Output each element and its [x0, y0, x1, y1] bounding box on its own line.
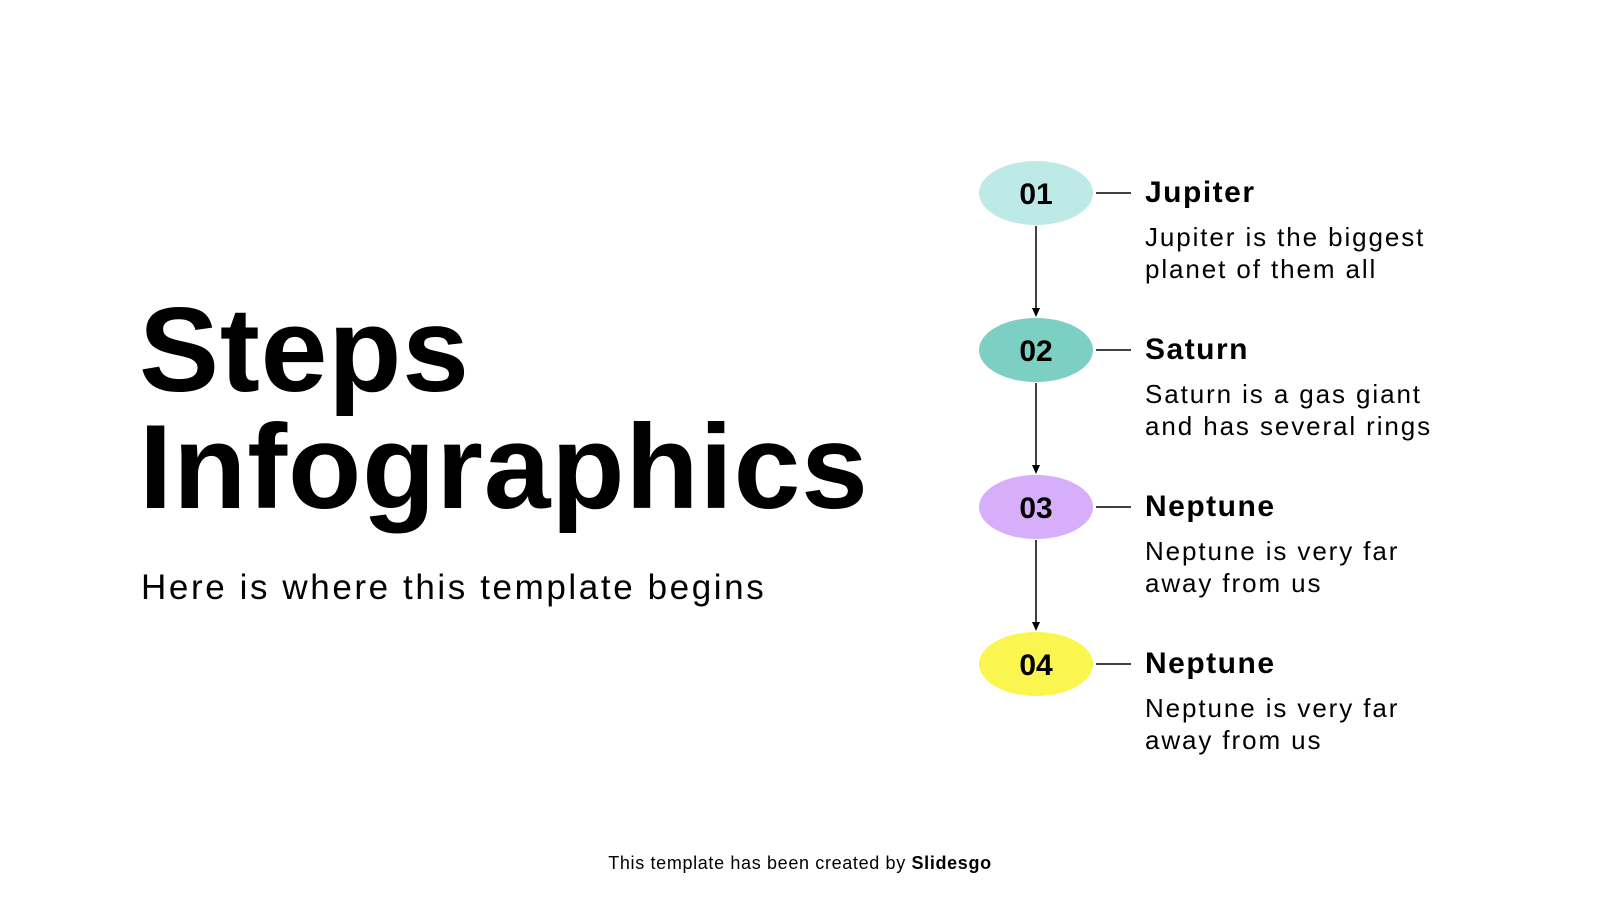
arrows: [1032, 226, 1040, 631]
text: away from us: [1145, 568, 1322, 598]
step 01: 01: [1019, 178, 1053, 211]
step 04: 04: [1019, 649, 1053, 682]
step 02: 02: [1019, 335, 1053, 368]
text: step 4: Neptune: [1145, 647, 1276, 680]
subtitle: Here is where this template begins: [141, 568, 766, 607]
text: Neptune is very far: [1145, 693, 1399, 723]
step 01: [979, 161, 1131, 225]
text: planet of them all: [1145, 254, 1377, 284]
text: step 1: Jupiter: [1145, 176, 1256, 209]
text: Saturn is a gas giant: [1145, 379, 1422, 409]
title: Infographics: [139, 400, 869, 534]
text: Neptune is very far: [1145, 536, 1399, 566]
step 04: [979, 632, 1131, 696]
footer: This template has been created by Slidesgo: [608, 853, 992, 873]
text: step 3: Neptune: [1145, 490, 1276, 523]
title: Steps: [139, 283, 470, 417]
text: and has several rings: [1145, 411, 1432, 441]
step 02: [979, 318, 1131, 382]
text: Jupiter is the biggest: [1145, 222, 1425, 252]
text: step 2: Saturn: [1145, 333, 1249, 366]
title: [139, 283, 869, 534]
text: away from us: [1145, 725, 1322, 755]
step 03: 03: [1019, 492, 1053, 525]
step 03: [979, 475, 1131, 539]
